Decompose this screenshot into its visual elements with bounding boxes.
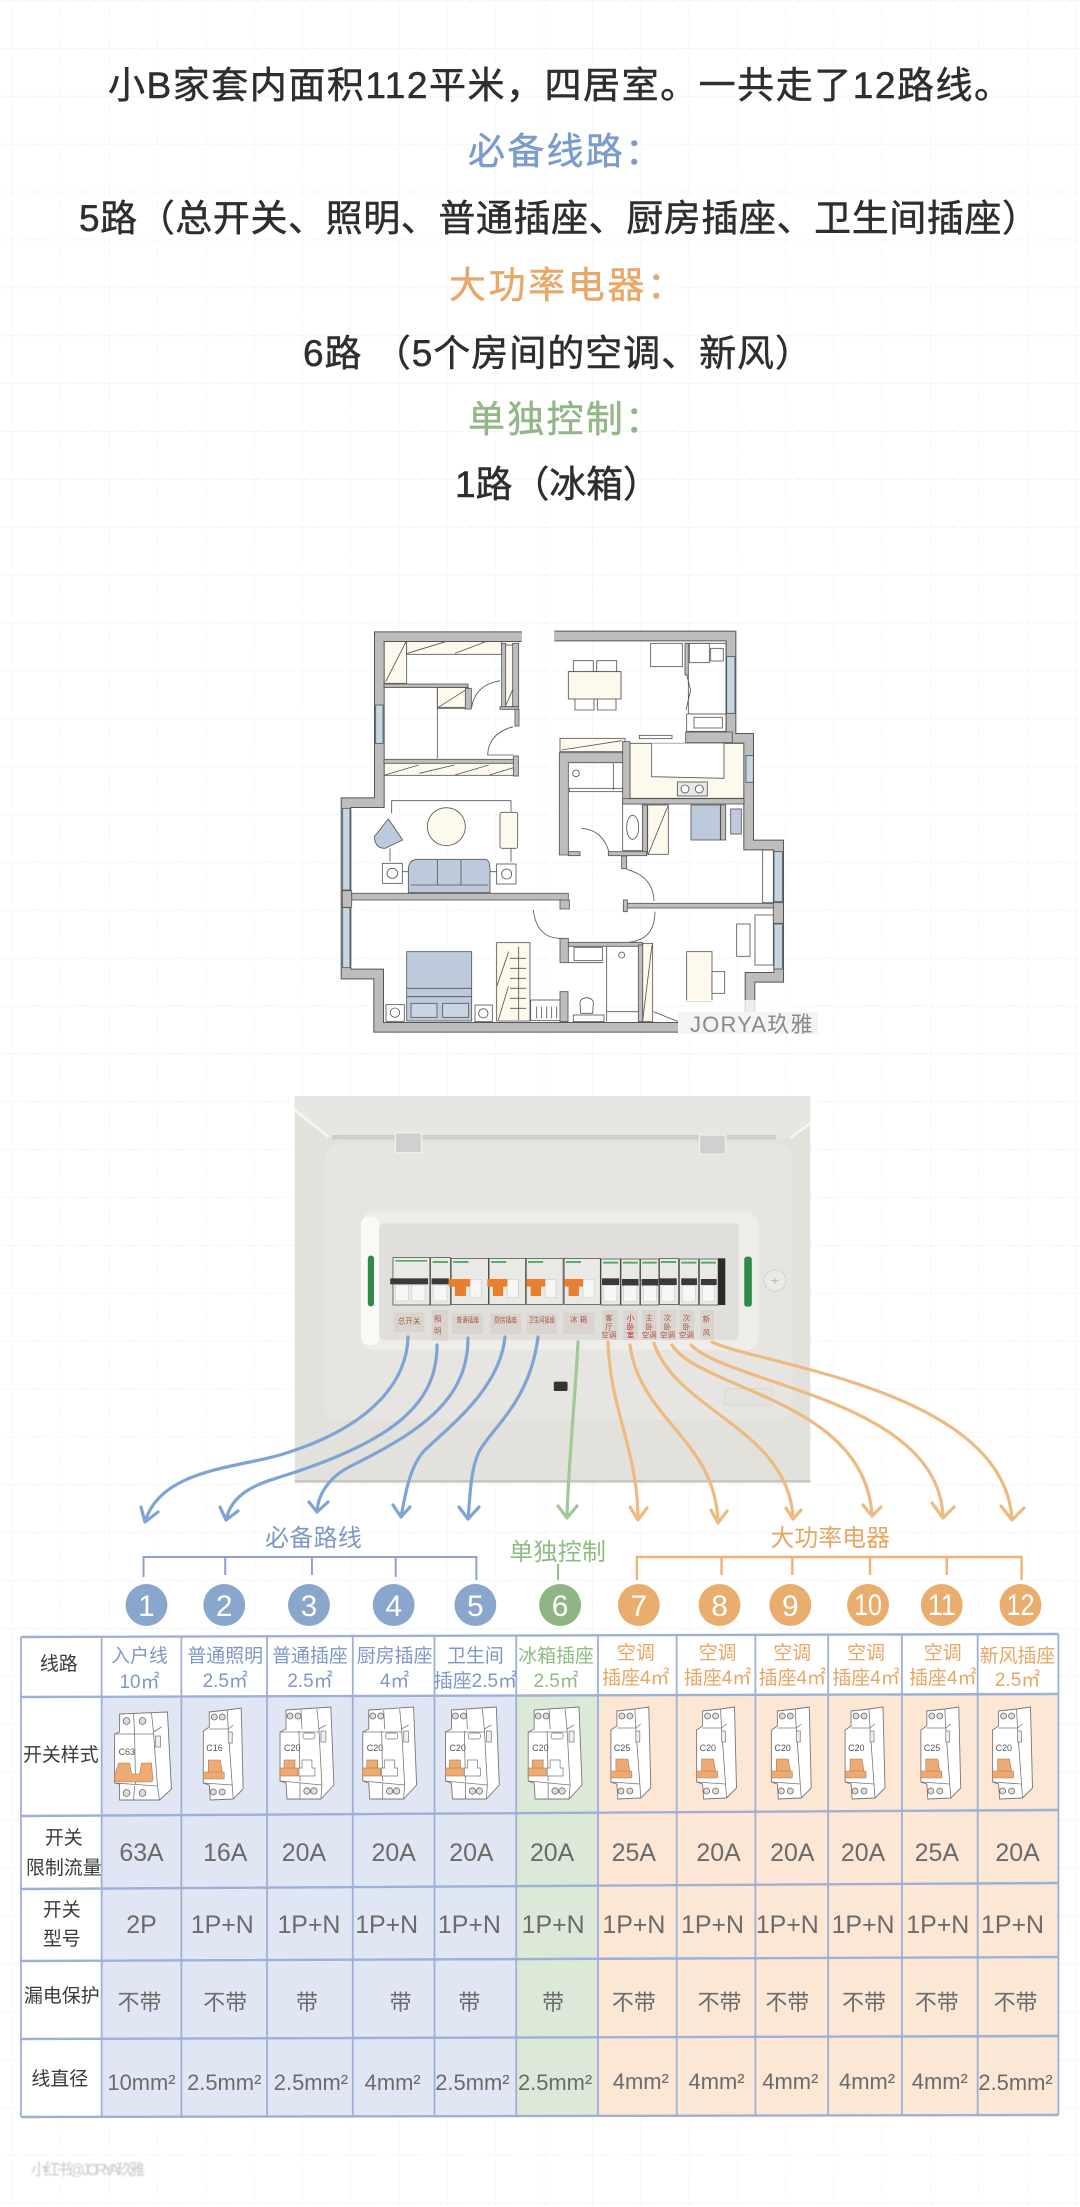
hinges [395, 1133, 422, 1153]
row: leakage protection: 不带 [203, 1990, 247, 2015]
switch icons: C20 [532, 1743, 549, 1753]
row: leakage protection: 不带 [915, 1990, 959, 2015]
heading: essential circuits: 必备线路： [468, 131, 662, 172]
row: leakage protection: 不带 [765, 1990, 809, 2015]
table grid [21, 1634, 1058, 2118]
row: switch model: 1P+N [438, 1911, 501, 1939]
cream furniture and closets [384, 638, 744, 1022]
switch icons [114, 1707, 1032, 1800]
circuit names: 2.5㎡ [533, 1669, 579, 1692]
circuit labels: 主 [645, 1313, 654, 1323]
circuit names: 4㎡ [380, 1669, 409, 1692]
separate control detail: 1路（冰箱） [455, 464, 660, 505]
row: current limit: 63A [119, 1839, 164, 1867]
row headers: 限制流量 [26, 1857, 102, 1879]
wires: essential circuits [141, 1337, 538, 1522]
circuit labels: 普通插座 [456, 1315, 479, 1325]
row: wire diameter: 2.5mm² [518, 2070, 592, 2095]
numbered circles: 2 [216, 1590, 233, 1623]
switch icons: C16 [206, 1743, 223, 1753]
numbered circles: 12 [1007, 1589, 1034, 1622]
circuit labels: 客 [605, 1313, 613, 1323]
door arcs [472, 681, 655, 942]
circuit names: 普通插座 [272, 1645, 348, 1667]
circuit labels: 卧 [645, 1322, 654, 1331]
switch icons: C25 [924, 1743, 940, 1753]
table background [21, 1634, 1058, 2117]
row: switch model: 1P+N [681, 1911, 744, 1939]
row: leakage protection: 带 [296, 1990, 318, 2015]
side tables [382, 850, 773, 1022]
row: wire diameter: 2.5mm² [435, 2070, 510, 2095]
footer watermark: 小红书@JORYA玖雅 [31, 2161, 145, 2179]
group bracket: high power [637, 1525, 1022, 1580]
circuit labels: 卧 [627, 1322, 635, 1331]
photo: distribution box [295, 1096, 810, 1483]
circuit names: 冰箱插座 [518, 1645, 594, 1667]
row: switch model: 1P+N [906, 1911, 969, 1939]
circuit names: 10㎡ [120, 1670, 160, 1693]
row: wire diameter: 2.5mm² [978, 2070, 1053, 2095]
circuit labels: 新 [703, 1313, 711, 1323]
circuit labels: 照 [434, 1315, 442, 1324]
walls [342, 636, 783, 1027]
circuit labels: 明 [434, 1326, 442, 1335]
switch icons: C20 [996, 1743, 1012, 1753]
circuit labels [394, 1310, 714, 1341]
switch icons: C20 [848, 1743, 865, 1753]
circuit labels: 室 [627, 1329, 635, 1339]
numbered circles: 9 [782, 1590, 799, 1623]
blue soft furnishings [374, 805, 741, 1021]
circuit labels: 次 [664, 1313, 672, 1323]
circuit labels: 空调 [642, 1329, 657, 1339]
row: current limit: 25A [612, 1839, 656, 1867]
row: current limit: 20A [770, 1839, 815, 1867]
switch icons: C20 [449, 1743, 466, 1753]
row: leakage protection: 带 [458, 1990, 480, 2015]
row: wire diameter: 4mm² [689, 2069, 745, 2094]
switch icons: C63 [119, 1747, 135, 1757]
row: wire diameter: 4mm² [912, 2069, 968, 2094]
inner panel [325, 1143, 793, 1420]
circuit names: 插座4㎡ [909, 1666, 976, 1689]
intro text block [79, 65, 1039, 505]
breaker window [361, 1212, 759, 1350]
row headers: 开关 [45, 1827, 83, 1849]
row: current limit: 20A [696, 1839, 741, 1867]
circuit labels: 厅 [605, 1322, 613, 1331]
row: current limit: 20A [449, 1839, 494, 1867]
circuit labels: 次 [683, 1313, 691, 1323]
wire: separate control [558, 1342, 578, 1518]
row: switch model: 1P+N [832, 1911, 895, 1939]
circuit labels: 冰 箱 [570, 1314, 588, 1324]
row headers: 漏电保护 [24, 1985, 100, 2007]
row: switch model: 1P+N [355, 1911, 418, 1939]
circuit names: 空调 [847, 1642, 885, 1664]
circuit labels: 空调 [660, 1329, 675, 1339]
switch icons: C20 [774, 1743, 791, 1753]
row: leakage protection: 不带 [118, 1990, 161, 2015]
row: current limit: 20A [995, 1839, 1040, 1867]
row: leakage protection: 不带 [698, 1990, 741, 2015]
row: leakage protection: 带 [390, 1990, 412, 2015]
row: current limit: 20A [530, 1839, 575, 1867]
heading: separate control: 单独控制： [468, 399, 662, 440]
row: wire diameter: 4mm² [613, 2069, 669, 2094]
screw [764, 1270, 786, 1291]
circuit names: 插座4㎡ [759, 1666, 826, 1689]
row headers [23, 1653, 102, 2090]
row: wire diameter: 4mm² [365, 2070, 421, 2095]
row: current limit: 25A [915, 1839, 959, 1867]
brand plate [724, 1388, 772, 1405]
white toggles [395, 1279, 715, 1302]
windows [343, 657, 782, 969]
group bracket: essential [144, 1525, 476, 1580]
row: wire diameter: 4mm² [839, 2069, 895, 2094]
numbered circles: 11 [928, 1589, 956, 1622]
numbered circles: 3 [301, 1590, 317, 1623]
intro line: 小B家套内面积112平米，四居室。一共走了12路线。 [108, 65, 1011, 106]
green strips [368, 1256, 374, 1306]
essential circuits detail: 5路（总开关、照明、普通插座、厨房插座、卫生间插座） [79, 198, 1039, 239]
row: switch model: 2P [126, 1911, 157, 1939]
circuit names: 插座4㎡ [602, 1666, 670, 1689]
row headers: 型号 [43, 1928, 81, 1950]
circuit names: 插座4㎡ [832, 1666, 900, 1689]
floor plan [342, 636, 783, 1027]
group bracket: separate [509, 1539, 606, 1580]
switch icons: C20 [367, 1743, 383, 1753]
row: current limit: 20A [841, 1839, 886, 1867]
row: switch model: 1P+N [981, 1911, 1044, 1939]
black bands [390, 1278, 717, 1286]
circuit names: 空调 [617, 1642, 655, 1664]
white cutouts and thin furniture [652, 743, 724, 778]
circuit names: 普通照明 [187, 1645, 263, 1667]
circuit names: 入户线 [111, 1645, 168, 1667]
heading: high power appliances: 大功率电器： [449, 265, 684, 306]
row: switch model: 1P+N [522, 1911, 585, 1939]
row: switch model: 1P+N [277, 1911, 340, 1939]
row: wire diameter: 10mm² [107, 2070, 176, 2095]
latch [554, 1382, 568, 1391]
row: current limit: 20A [372, 1839, 416, 1867]
circuit names: 2.5㎡ [287, 1669, 333, 1692]
row: wire diameter: 4mm² [762, 2069, 818, 2094]
circuit labels: 空调 [601, 1329, 616, 1339]
row: leakage protection: 不带 [994, 1990, 1037, 2015]
numbered circles: 10 [854, 1589, 882, 1622]
circuit labels: 风 [703, 1328, 711, 1337]
floor plan watermark [678, 1000, 818, 1037]
row: leakage protection: 不带 [612, 1990, 656, 2015]
row headers: 线直径 [31, 2068, 88, 2090]
high power detail: 6路 （5个房间的空调、新风） [303, 333, 812, 374]
wires: high power appliances [608, 1342, 1024, 1523]
circuit labels: 卧 [683, 1322, 691, 1331]
circuit names: 2.5㎡ [203, 1669, 248, 1692]
row: wire diameter: 2.5mm² [187, 2070, 261, 2095]
numbered circles: 8 [711, 1590, 728, 1623]
circuit names: 插座2.5㎡ [434, 1669, 517, 1692]
bracket label: separate: 单独控制 [509, 1539, 606, 1566]
numbered circles: 6 [552, 1590, 568, 1623]
orange toggles [449, 1279, 583, 1296]
table: circuit specifications [21, 1634, 1058, 2118]
circuit labels: 卧 [664, 1322, 672, 1331]
row: switch model: 1P+N [602, 1911, 665, 1939]
bracket label: high power: 大功率电器 [770, 1525, 890, 1552]
circuit names [111, 1642, 1055, 1693]
circuit labels: 总开关 [398, 1315, 421, 1325]
circuit names: 空调 [773, 1642, 811, 1664]
row: leakage protection [118, 1990, 1037, 2015]
circuit names: 2.5㎡ [995, 1668, 1040, 1691]
circuit names: 空调 [924, 1642, 962, 1664]
numbered circles: 1 [138, 1590, 155, 1623]
row: switch model [126, 1911, 1044, 1939]
circuit labels: 小 [627, 1313, 635, 1323]
row: current limit: 16A [203, 1839, 248, 1867]
circuit names: 插座4㎡ [684, 1666, 751, 1689]
row headers: 开关样式 [23, 1744, 99, 1766]
circuit names: 卫生间 [447, 1645, 504, 1667]
row headers: 开关 [43, 1899, 81, 1921]
row headers: 线路 [40, 1653, 78, 1675]
row: current limit: 20A [282, 1839, 326, 1867]
numbered circles [126, 1584, 1041, 1626]
row: current limit [119, 1839, 1040, 1867]
numbered circles: 4 [385, 1590, 402, 1623]
circuit names: 新风插座 [980, 1645, 1055, 1667]
row: switch model: 1P+N [756, 1911, 819, 1939]
floor plan watermark: JORYA玖雅 [690, 1012, 814, 1037]
row: switch model: 1P+N [191, 1911, 254, 1939]
circuit names: 厨房插座 [357, 1645, 433, 1667]
bracket label: essential: 必备路线 [265, 1525, 362, 1552]
green brand marks [395, 1260, 716, 1264]
breaker modules [390, 1258, 725, 1305]
row: wire diameter: 2.5mm² [274, 2070, 348, 2095]
circuit labels: 卫生间插座 [529, 1315, 555, 1325]
switch icons: C20 [284, 1743, 300, 1753]
circuit labels: 厨房插座 [494, 1315, 517, 1325]
row: leakage protection: 不带 [842, 1990, 886, 2015]
numbered circles: 5 [467, 1590, 484, 1623]
numbered circles: 7 [631, 1590, 647, 1623]
row: wire diameter [107, 2069, 1053, 2095]
switch icons: C25 [614, 1743, 630, 1753]
circuit labels: 空调 [679, 1329, 694, 1339]
circuit names: 空调 [699, 1642, 736, 1664]
row: leakage protection: 带 [542, 1990, 564, 2015]
switch icons: C20 [700, 1743, 716, 1753]
